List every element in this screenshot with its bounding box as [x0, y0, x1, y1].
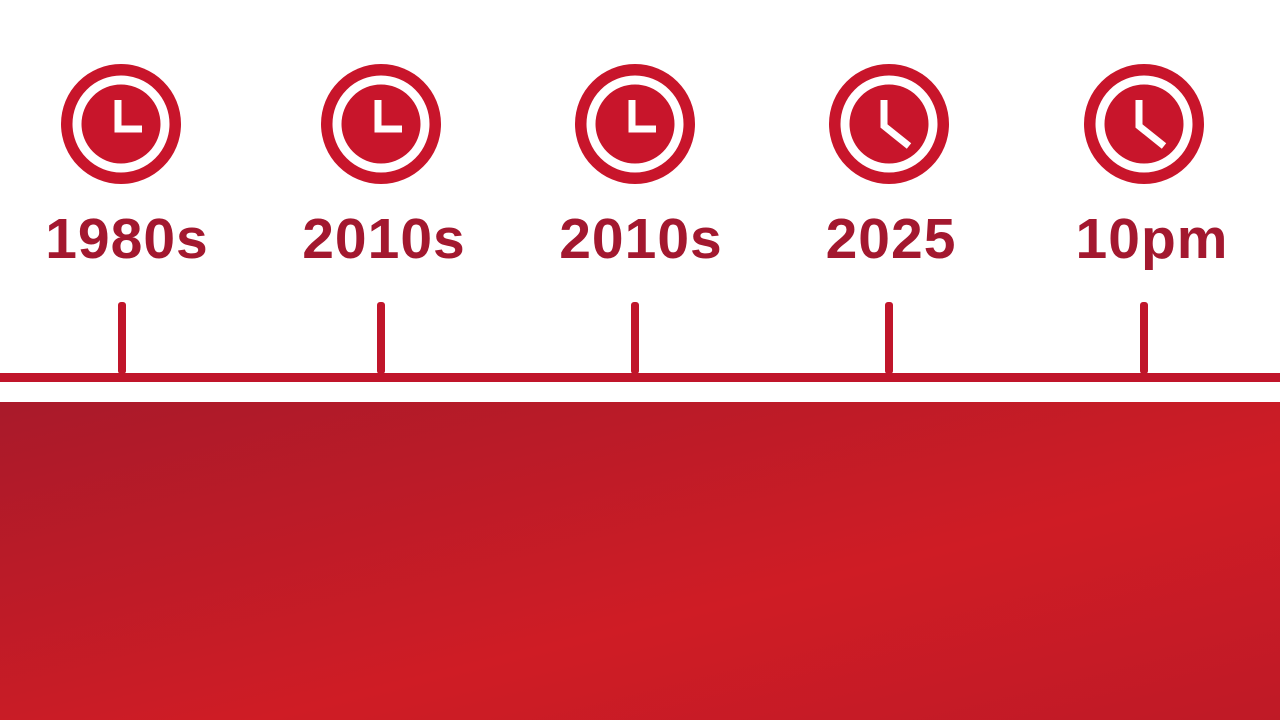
icon: clock 2 — [321, 64, 441, 184]
icon: clock 4 — [829, 64, 949, 184]
label: 2025: 2025 — [826, 207, 956, 271]
timeline axis — [0, 302, 1280, 382]
icon: clock 5 — [1084, 64, 1204, 184]
red bottom panel — [0, 402, 1280, 720]
icon: clock 3 — [575, 64, 695, 184]
label: 1980s: 1980s — [45, 207, 209, 271]
label: 2010s second: 2010s — [559, 207, 723, 271]
icon: clock 1 — [61, 64, 181, 184]
label: 2010s: 2010s — [302, 207, 466, 271]
label: 10pm: 10pm — [1076, 207, 1228, 271]
